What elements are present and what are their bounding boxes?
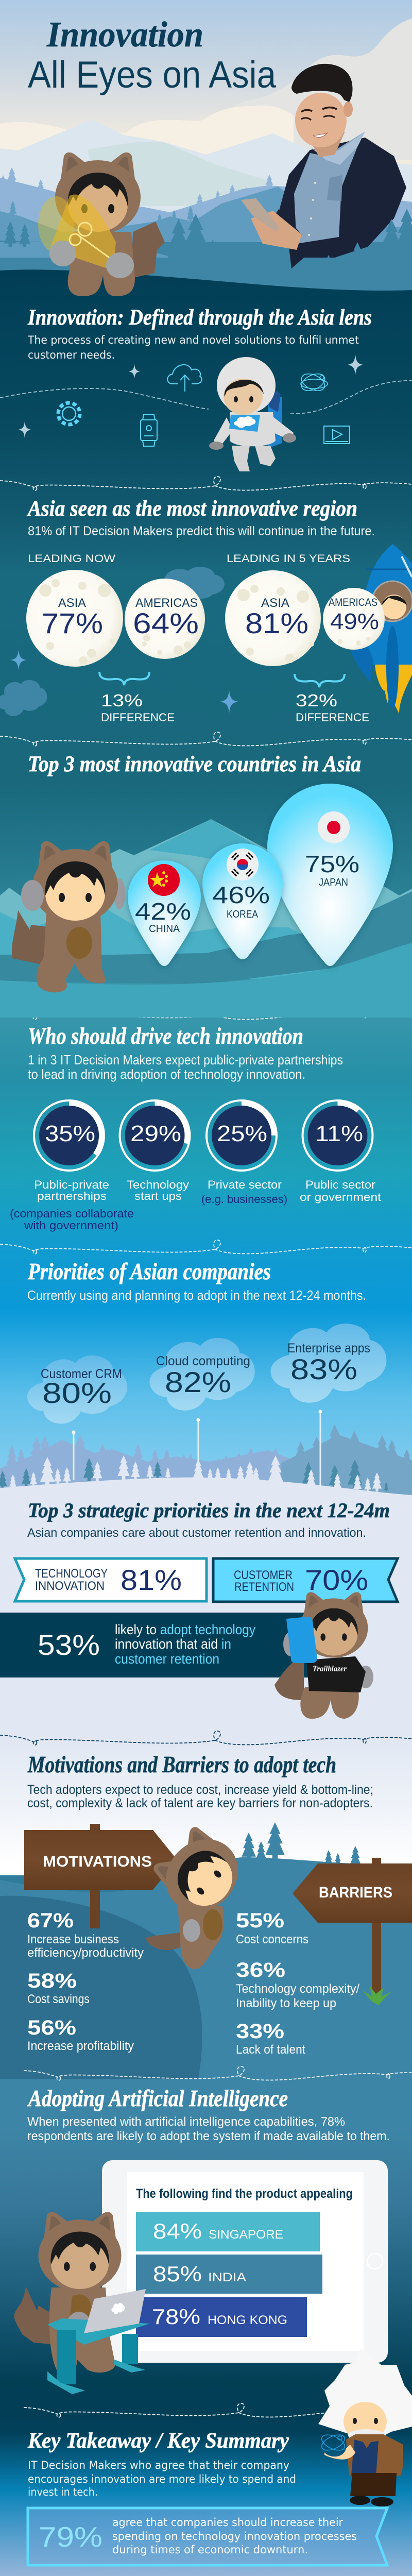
description: IT Decision Makers who agree that their company [28,2459,289,2471]
cloud: customer CRM 80% [27,1355,127,1480]
icon: atom network [299,370,328,394]
mascot: trailblazer bear with phone: Trailblazer [313,1665,347,1673]
ribbon: technology innovation 81%: 81% [121,1564,182,1596]
callout band: 53%: innovation that aid in [115,1636,231,1652]
description: customer needs. [28,349,115,361]
heading: Priorities of Asian companies [27,1258,271,1284]
mascot: bear with laptop at desk [14,2212,150,2394]
main dark to blue background [0,269,412,1499]
brace: 13% difference [99,672,175,724]
stats: barriers: 55% [236,1909,284,1932]
moon: Americas 64% [125,579,205,659]
section: adopting AI [27,2085,390,2143]
ribbon: 79% key stat: agree that companies should increase their [112,2516,343,2529]
signpost: barriers [293,1858,412,2005]
title line 1: Innovation [46,15,203,55]
gauge: 11% public sector [300,1100,381,1204]
snow background [0,1488,412,1875]
stats: motivations: Cost savings [27,1992,90,2006]
gauge: 25% private sector: Private sector [208,1178,282,1191]
stats: motivations: efficiency/productivity [27,1946,144,1960]
map pin: China [128,860,201,966]
ribbon: 79% key stat: during times of economic downturn. [112,2544,308,2556]
map pin: Japan: JAPAN [319,877,348,888]
moon: Americas 64%: AMERICAS [135,596,198,610]
ribbon: customer retention 70%: CUSTOMER [234,1568,293,1582]
gauge: 35% public-private: Public-private [34,1178,109,1191]
icon: upload cloud [167,365,202,392]
callout band: 53%: customer retention [115,1651,219,1667]
moon: Asia 81%: ASIA [261,596,289,610]
tablet chart [102,2160,388,2363]
map pin: Korea: KOREA [227,909,259,920]
gauge: 35% public-private: 35% [45,1121,95,1146]
cloud: enterprise apps 83% [270,1324,386,1488]
background clouds, rocket section [0,567,225,716]
bar: Hong Kong 78%: HONG KONG [208,2313,287,2327]
cloud: cloud computing 82%: 82% [165,1366,231,1398]
gauge: 35% public-private: partnerships [37,1190,107,1202]
stats: barriers [236,1909,359,2057]
section: key takeaway [27,2429,296,2498]
signpost: motivations: MOTIVATIONS [43,1853,152,1870]
stats: barriers: Technology complexity/ [236,1982,359,1996]
cloud: enterprise apps 83%: 83% [290,1353,357,1385]
subheading: Asian companies care about customer retention and innovation. [27,1526,366,1540]
stats: motivations: 67% [27,1909,74,1932]
hero background sky [0,0,412,289]
signpost: motivations [24,1824,177,1928]
moon: Asia 81% [225,570,321,666]
description: cost, complexity & lack of talent are key barriers for non-adopters. [27,1796,373,1810]
gauge: 35% public-private: (companies collaborate [10,1207,134,1220]
stats: motivations: 56% [27,2016,76,2039]
heading: Asia seen as the most innovative region [26,497,357,521]
map pin: Japan: 75% [305,851,359,877]
heading: Top 3 strategic priorities in the next 12-24m [28,1499,390,1522]
signpost: barriers: BARRIERS [319,1884,392,1901]
mascot: trailblazer bear with phone [274,1592,373,1719]
dividers [0,477,412,1254]
bar: Singapore 84% [136,2212,320,2251]
countries mountains [0,819,412,1018]
stats: motivations [27,1909,144,2053]
subheading: 81% of IT Decision Makers predict this will continue in the future. [28,524,375,538]
stats: barriers: Cost concerns [236,1933,308,1946]
gauge: 25% private sector [201,1100,287,1206]
section: motivations and barriers heading [27,1751,373,1810]
section: who should drive innovation [28,1023,343,1082]
title line 2: All Eyes on Asia [28,54,276,96]
ribbon: 79% key stat [28,2508,387,2565]
gauge: 11% public sector: 11% [315,1121,363,1146]
bar: Singapore 84%: 84% [153,2219,202,2243]
priorities landscape [0,1425,412,1502]
stats: barriers: Lack of talent [236,2043,305,2057]
brace: 32% difference: 32% [296,691,337,710]
heading: Adopting Artificial Intelligence [27,2085,288,2111]
stats: motivations: 58% [27,1970,77,1992]
label: leading in 5 years: LEADING IN 5 YEARS [227,553,350,565]
rocket with mascot [350,544,412,714]
map pin: China: CHINA [149,923,180,935]
mascot: falling bear [145,1820,253,1969]
moon: Asia 77%: 77% [42,607,103,639]
mascot: bear arms raised [12,841,125,992]
sparkle stars [18,354,363,438]
gauge: 11% public sector: Public sector [305,1178,375,1191]
moon: Asia 77% [26,570,123,667]
bar: Hong Kong 78%: 78% [152,2304,200,2329]
ribbon: technology innovation 81%: TECHNOLOGY [35,1567,108,1581]
icon: video player [324,426,350,444]
photo: man with smartphone [241,64,406,268]
moon: Americas 49%: 49% [330,609,379,634]
description [27,334,359,361]
icon: smartwatch [141,415,157,446]
moon: Americas 49%: AMERICAS [329,597,377,608]
cloud: enterprise apps 83%: Enterprise apps [287,1341,370,1355]
subheading: Currently using and planning to adopt in the next 12-24 months. [27,1287,366,1303]
bar: Hong Kong 78% [136,2297,307,2337]
brace: 32% difference: DIFFERENCE [296,711,369,724]
callout band: 53% [0,1613,309,1677]
description [28,2459,296,2498]
description [27,2115,390,2143]
brace: 13% difference: DIFFERENCE [101,711,175,724]
moon: Americas 49% [323,588,385,650]
section: priorities of Asian companies [27,1258,366,1303]
stars [11,650,238,713]
stats: motivations: Increase business [27,1933,119,1946]
ribbon: customer retention 70%: 70% [305,1564,368,1596]
section: most innovative region [26,497,375,565]
stats: motivations: Increase profitability [27,2039,134,2053]
hero mountains and trees [0,120,412,294]
bar: India 85% [136,2255,322,2294]
moon: Asia 77%: ASIA [58,596,86,610]
gauge: 25% private sector: (e.g. businesses) [201,1193,287,1206]
ribbon: customer retention 70% [213,1558,398,1602]
map pin: Korea: 46% [212,882,270,908]
callout band: 53%: likely to adopt technology [115,1622,255,1637]
ribbon: 79% key stat: 79% [39,2521,102,2553]
description: The process of creating new and novel solutions to fulfil unmet [27,334,359,346]
description: respondents are likely to adopt the system if made available to them. [27,2129,390,2143]
title [28,15,276,96]
mascot: astronaut [209,357,296,471]
bar: India 85%: 85% [153,2262,202,2286]
map pin: Japan [267,784,393,966]
gauge: 35% public-private: with government) [24,1219,118,1232]
moon: Asia 81%: 81% [245,607,308,639]
description: invest in tech. [28,2486,98,2498]
description: Tech adopters expect to reduce cost, increase yield & bottom-line; [27,1783,373,1797]
gauge: 35% public-private [10,1100,134,1232]
brace: 13% difference: 13% [101,691,143,710]
bar: Singapore 84%: SINGAPORE [209,2228,283,2242]
heading: Innovation: Defined through the Asia lens [27,306,372,330]
heading: top 3 countries: Top 3 most innovative countries in Asia [28,752,361,776]
label: leading now: LEADING NOW [28,553,115,565]
icon: gear [58,403,80,425]
description: encourages innovation are more likely to spend and [28,2473,296,2485]
cloud: cloud computing 82% [149,1338,255,1479]
gauge: 29% start ups: 29% [130,1121,181,1146]
cloud: customer CRM 80%: Customer CRM [41,1367,122,1381]
map pin: China: 42% [135,898,191,925]
gauge: 29% start ups [119,1100,190,1202]
ribbon: 79% key stat: spending on technology innovation processes [112,2530,357,2543]
gauge: 29% start ups: start ups [134,1190,182,1202]
heading: Motivations and Barriers to adopt tech [27,1751,336,1777]
ribbon: technology innovation 81% [15,1558,207,1601]
hero foreground trees [4,209,412,284]
divider navy [0,1731,412,1745]
ribbon: customer retention 70%: RETENTION [234,1580,294,1594]
gauge: 29% start ups: Technology [127,1178,189,1191]
gauge: 11% public sector: or government [300,1191,381,1204]
ribbon: technology innovation 81%: INNOVATION [35,1579,105,1593]
dividers lower [24,2066,412,2417]
gauge: 25% private sector: 25% [217,1121,267,1146]
callout band: 53%: 53% [38,1629,100,1661]
cloud: customer CRM 80%: 80% [42,1377,112,1409]
heading: Key Takeaway / Key Summary [27,2429,289,2453]
hills and trees [0,1822,412,2421]
section: strategic priorities [27,1499,390,1540]
description: 1 in 3 IT Decision Makers expect public-private partnerships [28,1052,343,1067]
description: to lead in driving adoption of technology innovation. [28,1066,305,1082]
stats: barriers: Inability to keep up [236,1996,336,2010]
moon: Americas 64%: 64% [133,607,199,639]
mascot: bear with yellow shield [38,152,165,296]
stats: barriers: 36% [236,1959,285,1981]
stats: barriers: 33% [236,2020,284,2043]
mascot: Einstein with atom [318,2348,412,2506]
brace: 32% difference [295,674,369,724]
chart title: The following find the product appealing [136,2187,353,2201]
map pin: Korea [202,843,283,959]
description: When presented with artificial intelligence capabilities, 78% [27,2115,345,2129]
section: innovation defined [27,306,372,361]
cloud: cloud computing 82%: Cloud computing [156,1354,250,1368]
dashed flight paths [0,381,412,414]
bar: India 85%: INDIA [208,2270,246,2284]
dark lower background [0,2079,412,2576]
heading: Who should drive tech innovation [28,1023,303,1049]
description [27,1783,373,1810]
description [28,1052,343,1082]
